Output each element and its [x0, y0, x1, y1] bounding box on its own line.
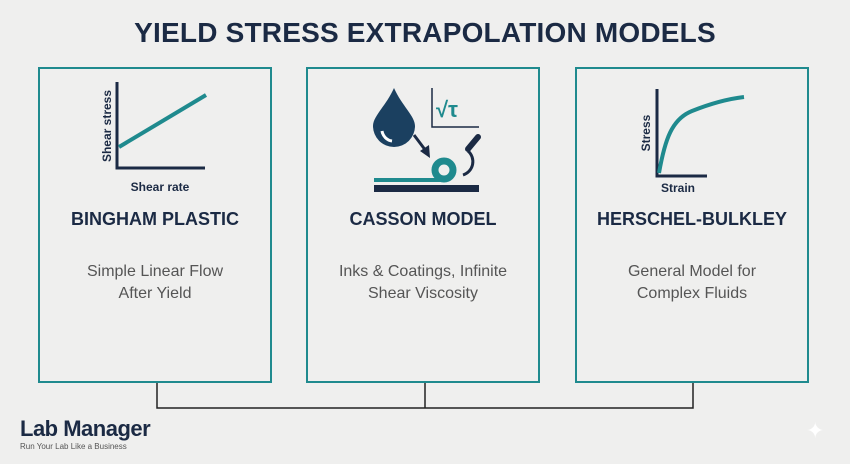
- description: After Yield: [119, 285, 191, 302]
- panel: herschel-bulkley: [575, 67, 809, 383]
- heading: HERSCHEL-BULKLEY: [597, 209, 787, 229]
- icon: sparkle: ✦: [806, 418, 824, 443]
- title: YIELD STRESS EXTRAPOLATION MODELS: [134, 17, 716, 48]
- logo: Lab Manager: [20, 416, 150, 441]
- heading: BINGHAM PLASTIC: [71, 209, 239, 229]
- logo: Run Your Lab Like a Business: [20, 442, 127, 451]
- heading: CASSON MODEL: [349, 209, 496, 229]
- chart: curve: [639, 89, 744, 195]
- chart: curve: Stress: [639, 114, 653, 151]
- chart: curve: Strain: [661, 181, 695, 195]
- description: Complex Fluids: [637, 285, 747, 302]
- icon: drop, roller and sqrt tau: [373, 88, 481, 192]
- description: [628, 263, 756, 302]
- chart: linear: Shear rate: [131, 180, 190, 194]
- chart: linear: [100, 82, 207, 194]
- chart: linear: Shear stress: [100, 90, 114, 162]
- description: Simple Linear Flow: [87, 263, 223, 280]
- description: [87, 263, 224, 302]
- description: [339, 263, 507, 302]
- description: Shear Viscosity: [368, 285, 478, 302]
- description: Inks & Coatings, Infinite: [339, 263, 507, 280]
- description: General Model for: [628, 263, 756, 280]
- panel: casson: [306, 67, 540, 383]
- icon: drop, roller and sqrt tau: √τ: [436, 97, 458, 122]
- panel: bingham: [38, 67, 272, 383]
